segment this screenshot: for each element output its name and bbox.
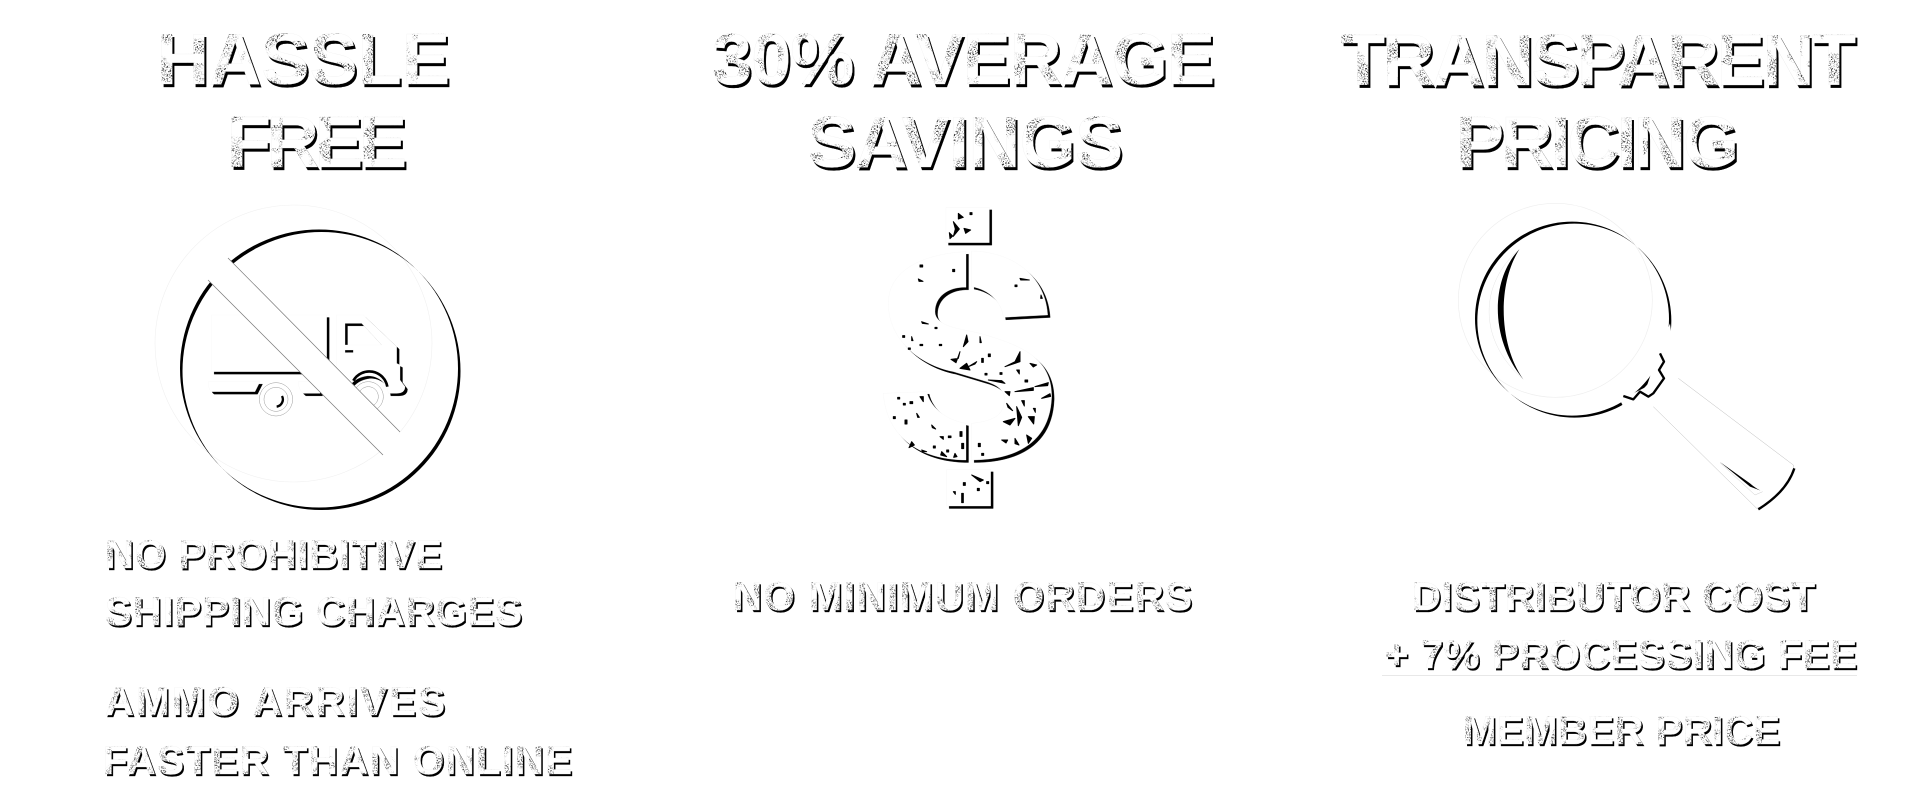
heading: 30% average savings — [712, 20, 1215, 183]
icon: no-truck prohibition sign — [155, 205, 460, 510]
heading: 30% average savings: SAVINGS — [808, 103, 1123, 183]
panel: hassle free — [103, 20, 572, 783]
heading: 30% average savings: 30% AVERAGE — [712, 20, 1215, 100]
panel: average savings — [712, 20, 1215, 619]
heading: transparent pricing: PRICING — [1456, 103, 1739, 183]
text: no prohibitive shipping charges: NO PROHIBITIVE — [105, 533, 442, 577]
icon: dollar sign — [883, 207, 1052, 506]
icon: magnifying glass — [1458, 203, 1794, 509]
text: ammo arrives faster than online — [103, 680, 572, 783]
heading: transparent pricing: TRANSPARENT — [1341, 21, 1856, 101]
panel: transparent pricing — [1341, 21, 1857, 753]
text: member price: MEMBER PRICE — [1463, 709, 1780, 753]
text: distributor cost plus 7% processing fee — [1385, 575, 1857, 677]
heading: transparent pricing — [1341, 21, 1856, 183]
text: no prohibitive shipping charges — [105, 533, 522, 634]
text: ammo arrives faster than online: AMMO ARRIVES — [105, 680, 445, 724]
heading: hassle free — [157, 20, 450, 183]
text: distributor cost plus 7% processing fee: + 7% PROCESSING FEE — [1385, 633, 1857, 677]
text: no prohibitive shipping charges: SHIPPING CHARGES — [105, 590, 522, 634]
text: distributor cost plus 7% processing fee: DISTRIBUTOR COST — [1412, 575, 1815, 619]
sum divider line — [1382, 675, 1857, 676]
heading: hassle free: FREE — [227, 103, 407, 183]
text: no minimum orders: NO MINIMUM ORDERS — [733, 575, 1192, 619]
text: ammo arrives faster than online: FASTER THAN ONLINE — [103, 739, 572, 783]
heading: hassle free: HASSLE — [157, 20, 450, 100]
